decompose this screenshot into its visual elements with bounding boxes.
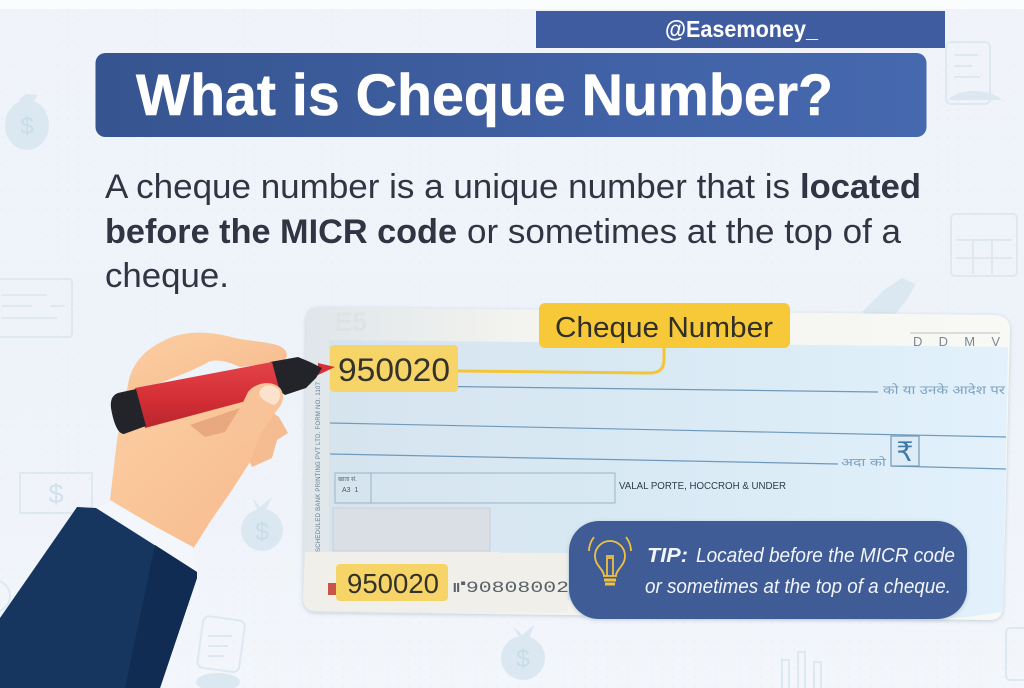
palm: [110, 385, 283, 549]
brand tag: [536, 11, 945, 48]
icon: money bag centre: [241, 497, 283, 551]
bottom number chip: [336, 564, 448, 601]
pen body: [135, 362, 280, 428]
icon: money bag bottom left: [0, 580, 10, 612]
icon: banknote: [20, 473, 92, 513]
micr code: ⑈90808002: [453, 579, 569, 597]
definition text: located: [800, 168, 921, 206]
icon: bar chart bottom: [782, 652, 821, 688]
sleeve: [0, 507, 197, 688]
connector line: [458, 346, 664, 373]
definition text: A cheque number is a unique number that is: [105, 168, 790, 206]
top number chip: 950020: [338, 352, 450, 388]
icon: banknote: $: [48, 479, 64, 509]
rupee box: ₹: [896, 437, 914, 468]
icon: money bag bottom middle: [501, 625, 545, 680]
icon: light bulb: [589, 537, 631, 584]
icon: calculator right: [951, 214, 1017, 276]
cheque number label: [539, 303, 790, 348]
sleeve shadow: [125, 545, 197, 688]
definition text: before the MICR code: [105, 213, 457, 251]
shadow under pen: [190, 408, 240, 437]
definition text: or sometimes at the top of a: [467, 213, 901, 251]
cheque bottom strip: [303, 552, 568, 613]
amount lines: [330, 423, 1006, 469]
pen nib: [318, 363, 335, 375]
icon: money bag left: [5, 94, 49, 150]
title banner: What is Cheque Number?: [136, 63, 833, 128]
watermark letters: E5: [335, 307, 367, 337]
account box: [335, 473, 615, 503]
tip callout: [569, 521, 967, 619]
cuff: [97, 502, 197, 572]
vertical micro text: SCHEDULED BANK PRINTING PVT LTD. FORM NO. 1107: [316, 381, 322, 552]
grey field: [333, 508, 490, 551]
bottom number chip: 950020: [347, 568, 439, 599]
icon: document bottom: [196, 615, 246, 688]
thumb: [232, 383, 283, 445]
brand tag: @Easemoney_: [665, 16, 818, 42]
icon: receipt top right: [946, 42, 1002, 104]
cheque paper: [303, 307, 1010, 620]
account box: खाता सं.: [338, 476, 357, 483]
red mark: [328, 583, 373, 595]
payee line: [330, 383, 1006, 397]
icon: cheque left: [0, 279, 72, 337]
tip text: Located before the MICR code: [696, 545, 955, 567]
marker pen: [111, 357, 335, 434]
fingers behind pen: [127, 333, 288, 467]
title banner: [96, 53, 926, 137]
thumbnail: [259, 385, 280, 405]
tip text: TIP:: [647, 545, 688, 567]
tip text: [645, 545, 955, 598]
definition text: [105, 168, 921, 295]
icon: doc bottom right: [1006, 628, 1024, 680]
pen tip: [270, 357, 322, 395]
icon: money bag bottom middle: $: [516, 645, 530, 673]
definition text: cheque.: [105, 257, 229, 295]
account box: A3 1: [342, 487, 358, 494]
hand with pen: [0, 333, 335, 688]
cheque: [303, 303, 1010, 620]
date boxes: DDMV: [913, 334, 1000, 349]
icon: money bag centre: $: [255, 518, 269, 546]
cheque number label: Cheque Number: [555, 312, 773, 344]
cheque blue field: [329, 340, 1008, 618]
top number chip: [330, 345, 458, 392]
rupee box: अदा को: [841, 456, 886, 469]
pen cap: [111, 389, 146, 434]
icon: money bag left: $: [20, 113, 34, 140]
tip text: or sometimes at the top of a cheque.: [645, 576, 951, 598]
payee line: को या उनके आदेश पर: [883, 383, 1006, 397]
rupee box: [841, 436, 919, 469]
icon: pen right: [862, 278, 916, 324]
branch text: VALAL PORTE, HOCCROH & UNDER: [619, 481, 786, 492]
